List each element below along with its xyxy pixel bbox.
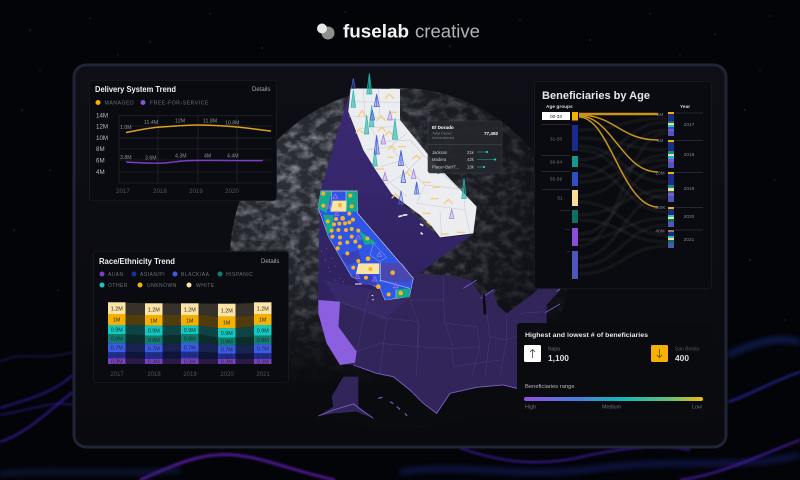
stacked bar chart: 1M bbox=[186, 318, 194, 324]
stacked bar chart: 1.2M bbox=[148, 308, 160, 314]
sankey chart: 40M bbox=[655, 228, 665, 234]
panel: Highest and lowest beneficiaries bbox=[517, 323, 712, 418]
line chart: 12M bbox=[175, 118, 185, 124]
stacked bar chart: 0.7M bbox=[184, 346, 196, 352]
selected age group: 00-33 bbox=[550, 114, 562, 119]
heading: Race/Ethnicity Trend: Race/Ethnicity Trend bbox=[99, 257, 175, 266]
line chart: 4.4M bbox=[227, 154, 239, 160]
stacked bar chart: 0.8M bbox=[184, 336, 196, 342]
legend: BLACK/AA bbox=[181, 272, 210, 278]
stacked bar chart: 0.9M bbox=[257, 328, 269, 334]
line chart: 11.4M bbox=[144, 120, 158, 126]
stacked bar chart: 0.5M bbox=[257, 354, 269, 360]
tooltip: El Dorado details: Jackson bbox=[432, 150, 448, 155]
stacked bar chart: 0.9M bbox=[111, 328, 123, 334]
stacked bar chart: 1M bbox=[223, 320, 231, 326]
starfield bbox=[13, 12, 785, 320]
stat: San Benito bbox=[651, 345, 700, 363]
stacked bar chart: 2018 bbox=[147, 372, 161, 378]
stacked bar chart: 1M bbox=[150, 318, 158, 324]
stat: San Benito: 400 bbox=[675, 353, 689, 363]
brand logo: fuselab bbox=[343, 22, 409, 42]
legend bbox=[96, 100, 209, 106]
sankey chart: 10M bbox=[655, 170, 665, 176]
line chart: 4M bbox=[204, 154, 211, 160]
stacked bar chart: 2021 bbox=[256, 372, 270, 378]
line chart: 3.8M bbox=[120, 155, 132, 161]
legend: AI/AN bbox=[108, 272, 124, 278]
legend: FREE-FOR-SERVICE bbox=[150, 100, 209, 106]
stacked bar chart: 0.7M bbox=[148, 346, 160, 352]
legend: WHITE bbox=[196, 283, 215, 289]
year stack 2017 bbox=[668, 112, 674, 136]
stacked bar chart: 0.8M bbox=[148, 338, 160, 344]
stacked bar chart bbox=[108, 302, 272, 378]
line chart: 8M bbox=[96, 146, 105, 153]
legend: HISPANIC bbox=[226, 272, 253, 278]
stat: San Benito: San Benito bbox=[675, 346, 700, 352]
stacked bar chart: 0.8M bbox=[257, 338, 269, 344]
stacked bar chart: 0.5M bbox=[111, 354, 123, 360]
stacked bar chart: 2020 bbox=[220, 372, 234, 378]
sankey chart: 2021 bbox=[684, 237, 695, 243]
sankey chart: 9M bbox=[657, 112, 663, 118]
line chart: 2017 bbox=[116, 188, 130, 195]
stacked bar chart: 0.8M bbox=[221, 340, 233, 346]
stacked bar chart: 0.7M bbox=[221, 348, 233, 354]
stacked bar chart: 1M bbox=[113, 318, 121, 324]
tooltip: El Dorado details: El Dorado bbox=[432, 125, 454, 130]
map: Alaska and Hawaii bbox=[318, 377, 407, 418]
line chart: 2018 bbox=[153, 188, 167, 195]
link: details: Details bbox=[261, 259, 279, 265]
tooltip: El Dorado details: Madera bbox=[432, 157, 447, 162]
tooltip: El Dorado details: Administered bbox=[432, 136, 454, 140]
legend: beneficiaries range: High bbox=[525, 404, 536, 410]
legend: beneficiaries range bbox=[524, 384, 703, 410]
stacked bar chart: 0.3M bbox=[257, 360, 269, 366]
brand logo bbox=[317, 22, 480, 42]
stacked bar chart: 1.2M bbox=[111, 306, 123, 312]
heading: Delivery System Trend: Delivery System Trend bbox=[95, 84, 176, 94]
panel: Race/Ethnicity Trend bbox=[94, 252, 288, 382]
background waves bbox=[0, 340, 800, 480]
stacked bar chart: 2017 bbox=[110, 372, 124, 378]
stacked bar chart: 1M bbox=[259, 318, 267, 324]
tooltip: El Dorado details: 77,492 bbox=[484, 131, 498, 136]
map: California highlighted on US bbox=[318, 300, 357, 365]
stacked bar chart: 0.7M bbox=[257, 346, 269, 352]
tooltip: El Dorado details: Placer-BaHT... bbox=[432, 164, 459, 170]
sankey chart bbox=[542, 104, 703, 279]
year stack 2020 bbox=[668, 207, 674, 227]
sankey chart: Age groups bbox=[546, 104, 573, 110]
legend: beneficiaries range: Medium bbox=[602, 404, 622, 410]
sankey chart: 8M bbox=[657, 138, 663, 144]
link: details: Details bbox=[252, 87, 270, 93]
legend: OTHER bbox=[108, 283, 128, 289]
selected age group bbox=[542, 112, 578, 120]
heading: highest and lowest: Highest and lowest # of beneficiaries bbox=[525, 332, 648, 339]
tooltip: El Dorado details: 21k bbox=[467, 150, 475, 155]
sankey chart: Year bbox=[680, 104, 690, 110]
sankey chart: 2018 bbox=[684, 152, 695, 158]
sankey chart: 460K bbox=[654, 205, 666, 211]
map: large California with pins bbox=[348, 73, 477, 237]
heading: Beneficiaries by Age: Beneficiaries by Age bbox=[542, 90, 650, 102]
stacked bar chart: 1.2M bbox=[257, 306, 269, 312]
brand logo: creative bbox=[415, 22, 480, 42]
line chart: 14M bbox=[96, 112, 108, 120]
map projection beams bbox=[318, 88, 473, 300]
stacked bar chart: 2019 bbox=[183, 372, 197, 378]
stacked bar chart: 0.5M bbox=[148, 354, 160, 360]
year stack 2019 bbox=[668, 172, 674, 202]
sankey chart: 2017 bbox=[684, 122, 695, 128]
stacked bar chart: 0.3M bbox=[111, 359, 123, 365]
line chart: 4M bbox=[96, 169, 105, 176]
map: mid-level California choropleth bbox=[318, 191, 413, 300]
legend: UNKNOWN bbox=[147, 283, 177, 289]
line chart bbox=[96, 112, 272, 195]
line chart: 12M bbox=[96, 124, 108, 130]
stacked bar chart: 0.3M bbox=[221, 360, 233, 366]
stacked bar chart: 1.2M bbox=[184, 308, 196, 314]
sankey chart: 51 bbox=[557, 196, 563, 202]
stacked bar chart: 0.9M bbox=[184, 328, 196, 334]
stacked bar chart: 0.8M bbox=[111, 336, 123, 342]
panel: Beneficiaries by Age bbox=[534, 82, 712, 288]
stacked bar chart: 0.5M bbox=[184, 353, 196, 359]
sankey chart: 55-59 bbox=[550, 176, 562, 182]
panel: Delivery System Trend bbox=[90, 80, 276, 200]
line chart: 2019 bbox=[189, 188, 203, 195]
line chart: 4.3M bbox=[175, 154, 187, 160]
tooltip: El Dorado details bbox=[428, 121, 502, 173]
legend: ASIAN/PI bbox=[140, 272, 165, 278]
stacked bar chart: 0.9M bbox=[148, 328, 160, 334]
tooltip: El Dorado details: 13k bbox=[467, 164, 475, 170]
sankey chart: 2019 bbox=[684, 186, 695, 192]
legend bbox=[100, 272, 253, 289]
stacked bar chart: 0.7M bbox=[111, 346, 123, 352]
stat: Napa: Napa bbox=[548, 346, 560, 352]
line chart: 3.6M bbox=[145, 156, 157, 162]
stat: Napa bbox=[524, 345, 569, 363]
line chart: 10M bbox=[96, 135, 108, 142]
legend: beneficiaries range: Low bbox=[692, 404, 702, 410]
line chart: 1.0M bbox=[120, 125, 132, 131]
stacked bar chart: 0.3M bbox=[148, 360, 160, 366]
sankey chart: 2020 bbox=[684, 214, 695, 220]
line chart: 10.8M bbox=[225, 120, 239, 126]
tooltip: El Dorado details: 42k bbox=[467, 157, 475, 162]
map: United States bbox=[318, 268, 568, 413]
stacked bar chart: 0.9M bbox=[221, 331, 233, 337]
legend: beneficiaries range: Beneficiaries range bbox=[525, 384, 575, 390]
globe bbox=[230, 88, 570, 428]
sankey chart: 60-64 bbox=[550, 160, 562, 166]
sankey chart: 31-50 bbox=[550, 136, 562, 142]
dashboard frame bbox=[74, 65, 726, 447]
tooltip: El Dorado details: Total Doses bbox=[432, 132, 452, 136]
stacked bar chart: 0.5M bbox=[221, 354, 233, 360]
line chart: 6M bbox=[96, 158, 105, 164]
stacked bar chart: 0.3M bbox=[184, 359, 196, 365]
year stack 2021 bbox=[668, 230, 674, 248]
stat: Napa: 1,100 bbox=[548, 353, 569, 363]
stacked bar chart: 1.2M bbox=[221, 308, 233, 314]
line chart: 11.8M bbox=[203, 118, 217, 124]
year stack 2018 bbox=[668, 140, 674, 168]
legend: MANAGED bbox=[104, 100, 134, 106]
line chart: 2020 bbox=[225, 188, 239, 195]
